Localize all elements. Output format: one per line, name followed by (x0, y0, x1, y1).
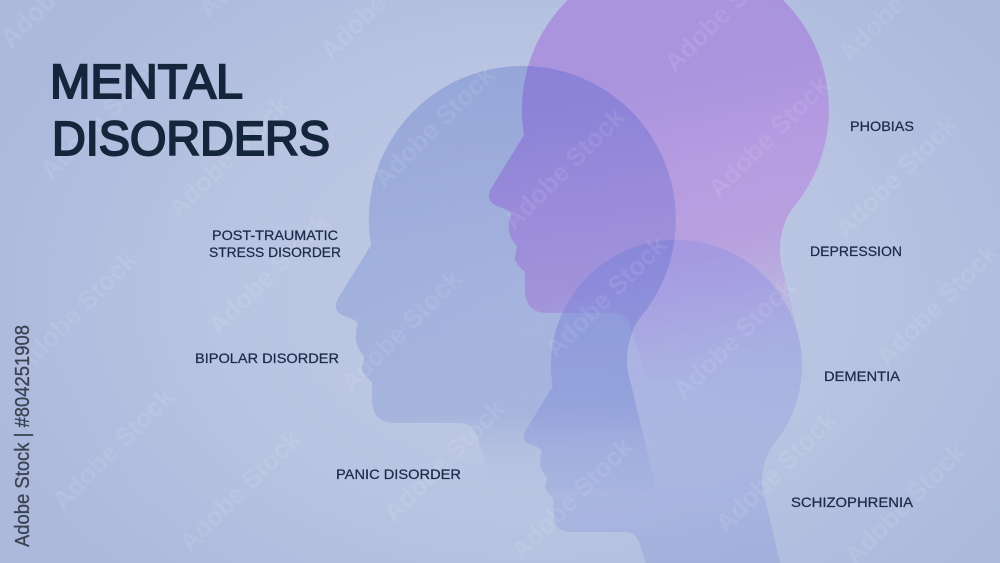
label: post-traumatic stress disorder: STRESS DISORDER (209, 244, 341, 260)
stock watermarks: Adobe Stock (667, 271, 801, 405)
stock watermarks: Adobe Stock (497, 101, 631, 235)
label: phobias: PHOBIAS (850, 118, 914, 134)
label: post-traumatic stress disorder (209, 227, 341, 260)
stock watermarks: Adobe Stock (202, 206, 336, 340)
stock watermarks: Adobe Stock (34, 51, 168, 185)
stock watermarks: Adobe Stock (173, 423, 307, 557)
stock watermarks: Adobe Stock (334, 263, 468, 397)
title (50, 56, 330, 166)
stock watermarks: Adobe Stock (539, 229, 673, 363)
label: depression: DEPRESSION (810, 243, 902, 259)
stock watermarks: Adobe Stock (702, 69, 836, 203)
head silhouette: purple top right (489, 0, 829, 380)
stock watermarks: Adobe Stock (46, 381, 180, 515)
stock watermarks: Adobe Stock (505, 431, 639, 563)
stock watermarks: Adobe Stock (377, 393, 511, 527)
stock watermarks: Adobe Stock (367, 59, 501, 193)
overlap shading between blue and periwinkle heads (526, 240, 674, 432)
stock watermarks: Adobe Stock (162, 89, 296, 223)
label: panic disorder: PANIC DISORDER (336, 466, 461, 482)
title: MENTAL (50, 56, 243, 109)
title: DISORDERS (52, 113, 330, 166)
stock watermarks: Adobe Stock (9, 244, 143, 378)
label: dementia: DEMENTIA (824, 368, 901, 384)
head silhouette: blue left (336, 66, 676, 490)
stock watermarks: Adobe Stock (829, 109, 963, 243)
label: schizophrenia: SCHIZOPHRENIA (791, 494, 914, 510)
stock watermarks: Adobe Stock (870, 237, 1000, 371)
label: bipolar disorder: BIPOLAR DISORDER (195, 350, 339, 366)
stock id side text: Adobe Stock | #804251908 (12, 325, 34, 547)
stock watermarks: Adobe Stock (709, 404, 843, 538)
label: post-traumatic stress disorder: POST-TRAUMATIC (212, 227, 338, 243)
head silhouette: periwinkle bottom (524, 240, 802, 563)
